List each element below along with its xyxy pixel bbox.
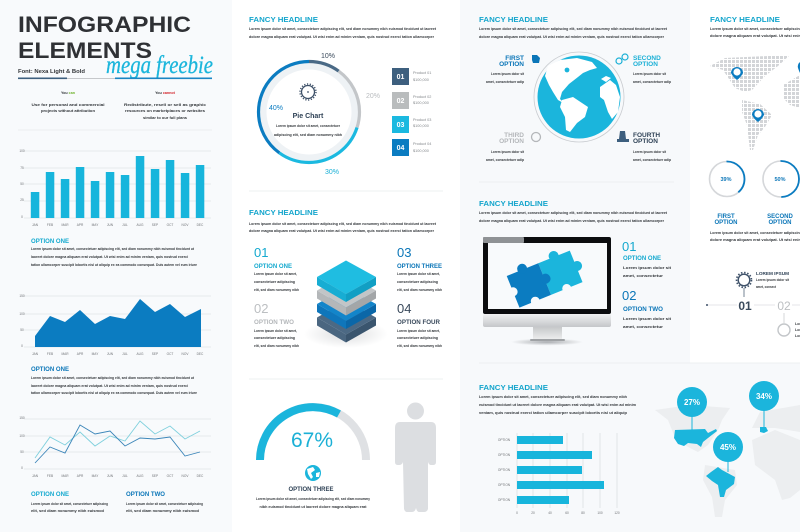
option 01: amet, consectetur	[623, 274, 664, 278]
timeline text: LOREM IPSUM	[756, 271, 790, 276]
text block: line chart option one: elit, sed diam nonummy nibh euismod	[31, 509, 105, 513]
icon: person	[395, 402, 436, 512]
option three text: nibh euismod tincidunt ut laoreet dolore magna aliquam erat	[260, 505, 367, 509]
icon: gear	[300, 84, 316, 100]
panel: layered stack	[249, 208, 443, 348]
first option: OPTION	[499, 61, 524, 68]
icon: globe	[305, 465, 321, 481]
text block: area chart option one: OPTION ONE	[31, 366, 70, 373]
step 02 number: 02	[777, 299, 791, 313]
intro text: veniam, quis nostrud exerci tation ullamcorper suscipit lobortis nisl ut aliquip	[479, 411, 628, 415]
panel: monitor with puzzle	[479, 199, 672, 346]
first option: amet, consectetuer adip	[486, 80, 525, 84]
option 02: amet, consectetur	[623, 325, 664, 329]
text block: area chart option one: tation ullamcorper suscipit lobortis nisl ut aliquip ex ea commodo consequat. Duis autem vel eum iriure	[31, 391, 197, 395]
panel: gauge and person	[256, 402, 436, 512]
line chart: SEP	[152, 474, 158, 478]
legend: Product 04	[413, 142, 431, 146]
dotted map	[710, 55, 800, 150]
bar chart: 100	[19, 149, 25, 153]
timeline text: amet, consect	[756, 285, 777, 289]
icon: fourth option lighthouse	[617, 131, 629, 142]
intro text: Lorem ipsum dolor sit amet, consectetuer adipiscing	[710, 27, 800, 31]
line chart: 100	[19, 434, 25, 438]
intro text: Lorem ipsum dolor sit amet, consectetuer adipiscing elit, sed diam nonummy nibh euismod tincidunt ut laoreet	[479, 27, 668, 31]
fourth option: FOURTH	[633, 132, 660, 139]
option 01: OPTION ONE	[254, 263, 293, 270]
text block: area chart option one: Lorem ipsum dolor sit amet, consectetuer adipiscing elit, sed diam nonummy nibh euismod tincidunt ut	[31, 376, 195, 380]
usage note: you cannot: resources on marketplaces or websites	[125, 109, 205, 113]
option 02: OPTION TWO	[254, 319, 294, 326]
gauge	[260, 407, 366, 460]
legend: $100,000	[413, 78, 429, 82]
third option: THIRD	[504, 132, 524, 139]
panel: horizontal bars	[479, 383, 637, 515]
horizontal bar chart: 120	[614, 511, 620, 515]
option 04: OPTION FOUR	[397, 319, 440, 326]
text below rings: dolore magna aliquam erat volutpat. Ut wisi enim	[710, 238, 800, 242]
option three text: Lorem ipsum dolor sit amet, consectetuer adipiscing elit, sed diam nonummy	[256, 497, 371, 501]
text block: line chart option two	[126, 491, 203, 513]
option 04: elit, sed diam nonummy nibh	[397, 344, 443, 348]
horizontal bar chart: 20	[531, 511, 535, 515]
second option label: OPTION	[768, 220, 792, 226]
intro text: Lorem ipsum dolor sit amet, consectetuer adipiscing elit, sed diam nonummy nibh euismod tincidunt ut laoreet	[249, 222, 437, 226]
legend: $100,000	[413, 101, 429, 105]
bar chart: NOV	[182, 223, 189, 227]
gauge value: 67%	[291, 429, 333, 452]
legend: Product 01	[413, 71, 431, 75]
heading: FANCY HEADLINE	[479, 15, 548, 24]
option 01: OPTION ONE	[623, 255, 662, 262]
third option: amet, consectetuer adip	[486, 158, 525, 162]
option 01: 01	[622, 239, 636, 254]
area chart: 150	[19, 294, 25, 298]
pie labels: 20%	[366, 93, 380, 100]
option 03: Lorem ipsum dolor sit amet,	[397, 272, 440, 276]
second option label: SECOND	[767, 214, 794, 220]
intro text: dolore magna aliquam erat volutpat. Ut wisi enim ad minim veniam, quis nostrud exerci tation ullamcorper	[249, 35, 435, 39]
area chart: 0	[21, 344, 23, 348]
line chart: OCT	[167, 474, 173, 478]
step 01 backing	[737, 298, 754, 312]
intro text: dolore magna aliquam erat volutpat. Ut wisi enim ad minim veniam, quis nostrud exerci tation ullamcorper	[479, 219, 665, 223]
bar chart: JUN	[107, 223, 114, 227]
world map base	[655, 405, 800, 517]
title underline	[18, 78, 212, 79]
area chart: 100	[19, 312, 25, 316]
callout: Europe 34%: 34%	[756, 392, 772, 401]
legend	[392, 68, 431, 156]
intro text: Lorem ipsum dolor sit amet, consectetuer adipiscing elit, sed diam nonummy nibh euismod tincidunt ut laoreet	[249, 27, 437, 31]
usage note: you can	[32, 91, 104, 113]
option 02	[622, 288, 672, 329]
pie center text: Pie Chart	[293, 113, 324, 120]
text block: bar chart option one	[31, 238, 197, 267]
bar chart: 50	[20, 182, 24, 186]
option 02: 02	[254, 301, 268, 316]
second option: OPTION	[633, 61, 658, 68]
legend: 04	[397, 145, 404, 152]
step 01 number: 01	[738, 299, 752, 313]
second option	[633, 55, 672, 84]
heading: FANCY HEADLINE	[249, 15, 318, 24]
progress ring: second option	[763, 161, 799, 197]
callout: Europe 34%	[749, 381, 779, 433]
line chart: 50	[20, 450, 24, 454]
panel: world map with callouts	[655, 381, 800, 517]
text block: area chart option one	[31, 366, 197, 395]
option 02: 02	[622, 288, 636, 303]
option 02: elit, sed diam nonummy nibh	[254, 344, 300, 348]
icon: third option	[532, 132, 540, 142]
line chart: DEC	[197, 474, 204, 478]
area chart: JUN	[107, 352, 114, 356]
timeline text: Lorem ipsum dolor sit	[756, 278, 790, 282]
bar chart: OCT	[167, 223, 173, 227]
bar chart: 0	[21, 215, 23, 219]
second option: Lorem ipsum dolor sit	[633, 72, 667, 76]
area chart: MAY	[92, 352, 99, 356]
line chart: JAN	[32, 474, 39, 478]
option 03: 03	[397, 245, 411, 260]
pie center text	[274, 113, 343, 137]
bar chart: AUG	[137, 223, 144, 227]
bar chart: MAR	[61, 223, 69, 227]
area chart: DEC	[197, 352, 204, 356]
callout: USA 27%	[674, 387, 717, 447]
usage note: you cannot	[124, 91, 206, 120]
bar chart: MAY	[92, 223, 99, 227]
intro text	[249, 27, 437, 39]
text below rings	[710, 231, 800, 242]
option 04: 04	[397, 301, 411, 316]
option 01: Lorem ipsum dolor sit amet,	[254, 272, 297, 276]
intro text	[249, 222, 437, 233]
second option: SECOND	[633, 55, 661, 62]
first option label: OPTION	[714, 220, 738, 226]
bar chart: APR	[77, 223, 84, 227]
text block: line chart option one	[31, 491, 108, 513]
script title: mega freebie: mega freebie	[106, 52, 213, 79]
area chart: FEB	[47, 352, 53, 356]
bar chart: JAN	[32, 223, 39, 227]
map pins	[731, 62, 800, 122]
first option	[486, 55, 525, 84]
icon: timeline gear	[736, 272, 752, 297]
option 01	[622, 239, 672, 278]
globe	[534, 52, 624, 142]
line chart: 0	[21, 466, 23, 470]
first option: Lorem ipsum dolor sit	[491, 72, 525, 76]
option 02	[254, 301, 300, 348]
area chart: NOV	[182, 352, 189, 356]
pie labels: 40%	[269, 105, 283, 112]
usage note: you cannot: You cannot	[155, 91, 176, 95]
option 01	[254, 245, 300, 292]
area chart: JUL	[122, 352, 128, 356]
horizontal bar chart: 80	[581, 511, 585, 515]
fourth option: amet, consectetuer adip	[633, 158, 672, 162]
intro text	[479, 27, 668, 39]
step 02 backing	[775, 298, 792, 312]
option 03: consectetuer adipiscing	[397, 280, 438, 284]
area chart: APR	[77, 352, 84, 356]
area chart: MAR	[61, 352, 69, 356]
horizontal bar chart: 60	[565, 511, 569, 515]
pie ring	[258, 62, 360, 162]
heading: FANCY HEADLINE	[479, 199, 548, 208]
pie labels: 30%	[325, 169, 339, 176]
fourth option: OPTION	[633, 138, 658, 145]
first option: FIRST	[505, 55, 524, 62]
intro text	[479, 395, 637, 415]
option 01: 01	[254, 245, 268, 260]
area chart: AUG	[137, 352, 144, 356]
legend: 01	[397, 74, 404, 81]
bar chart: SEP	[152, 223, 158, 227]
horizontal bar chart: 100	[597, 511, 603, 515]
intro text: dolore magna aliquam erat volutpat. Ut wisi enim ad minim veniam, quis nostrud exerci tation ullamcorper	[479, 35, 665, 39]
option 04: consectetuer adipiscing	[397, 336, 438, 340]
isometric stack	[304, 260, 388, 348]
intro text: euismod tincidunt ut laoreet dolore magna aliquam erat volutpat. Ut wisi enim ad minim	[479, 403, 637, 407]
option 01: consectetuer adipiscing	[254, 280, 295, 284]
horizontal bar chart: OPTION	[498, 468, 511, 472]
usage note: you can: Use for personal and commercial	[32, 103, 104, 107]
option 01: Lorem ipsum dolor sit	[623, 266, 672, 270]
progress ring: first option: 39%	[720, 177, 732, 183]
usage note: you can: projects without attribution	[41, 109, 96, 113]
option 02: Lorem ipsum dolor sit amet,	[254, 329, 297, 333]
legend: 02	[397, 98, 404, 105]
horizontal bar chart: OPTION	[498, 438, 511, 442]
option 04: Lorem ipsum dolor sit amet,	[397, 329, 440, 333]
bar chart: FEB	[47, 223, 53, 227]
option three text: OPTION THREE	[288, 486, 334, 493]
horizontal bar chart	[498, 433, 620, 515]
heading: FANCY HEADLINE	[249, 208, 318, 217]
line chart: JUL	[122, 474, 128, 478]
text block: area chart option one: laoreet dolore magna aliquam erat volutpat. Ut wisi enim ad minim veniam, quis nostrud exerci	[31, 384, 188, 388]
line chart: APR	[77, 474, 84, 478]
line chart: NOV	[182, 474, 189, 478]
line chart: JUN	[107, 474, 114, 478]
fourth option	[633, 132, 672, 162]
intro text: dolore magna aliquam erat volutpat. Ut wisi enim ad minim veniam, quis nostrud exerci tation ullamcorper	[249, 229, 435, 233]
option 04	[397, 301, 443, 348]
bar chart	[19, 149, 211, 227]
text block: bar chart option one: OPTION ONE	[31, 238, 70, 245]
line chart: FEB	[47, 474, 53, 478]
panel: timeline	[706, 271, 800, 338]
pie labels	[269, 53, 380, 176]
heading: FANCY HEADLINE	[479, 383, 548, 392]
option 03: elit, sed diam nonummy nibh	[397, 288, 443, 292]
option 01: elit, sed diam nonummy nibh	[254, 288, 300, 292]
icon: second option link	[616, 54, 628, 64]
bar chart: DEC	[197, 223, 204, 227]
text block: line chart option one: OPTION ONE	[31, 491, 70, 498]
area chart: SEP	[152, 352, 158, 356]
bar chart: JUL	[122, 223, 128, 227]
intro text	[710, 27, 800, 38]
icon: first option puzzle	[532, 55, 540, 63]
third option: OPTION	[499, 138, 524, 145]
option 02: Lorem ipsum dolor sit	[623, 317, 672, 321]
usage note: you cannot: Redistribute, resell or sell as graphic	[124, 103, 206, 107]
panel: dotted world map	[710, 15, 800, 242]
text block: line chart option one: Lorem ipsum dolor sit amet, consectetuer adipiscing	[31, 502, 108, 506]
subtitle: font credit: Font: Nexa Light & Bold	[18, 69, 85, 75]
text block: line chart option two: Lorem ipsum dolor sit amet, consectetuer adipiscing	[126, 502, 203, 506]
line chart	[19, 416, 211, 478]
title	[18, 12, 191, 63]
progress ring: first option	[710, 162, 744, 196]
title: ELEMENTS	[18, 38, 152, 63]
horizontal bar chart: 40	[548, 511, 552, 515]
horizontal bar chart: OPTION	[498, 498, 511, 502]
fourth option: Lorem ipsum dolor sit	[633, 150, 667, 154]
second option label	[767, 214, 794, 226]
first option label: FIRST	[717, 214, 735, 220]
bar chart: 75	[20, 166, 24, 170]
intro text: Lorem ipsum dolor sit amet, consectetuer adipiscing elit, sed diam nonummy nibh euismod tincidunt ut laoreet	[479, 211, 668, 215]
legend: $100,000	[413, 149, 429, 153]
panel: globe	[479, 15, 672, 162]
legend: 03	[397, 122, 404, 129]
area chart	[19, 294, 211, 356]
option 03	[397, 245, 443, 292]
intro text: Lorem ipsum dolor sit amet, consectetuer adipiscing elit, sed diam nonummy nibh	[479, 395, 628, 399]
pie labels: 10%	[321, 53, 335, 60]
monitor	[483, 237, 611, 346]
option 02: consectetuer adipiscing	[254, 336, 295, 340]
callout: USA 27%: 27%	[684, 398, 700, 407]
line chart: MAY	[92, 474, 99, 478]
title: INFOGRAPHIC	[18, 12, 191, 37]
area chart: JAN	[32, 352, 39, 356]
bar chart: 25	[20, 198, 24, 202]
second option: amet, consectetuer adip	[633, 80, 672, 84]
line chart: MAR	[61, 474, 69, 478]
text block: line chart option two: OPTION TWO	[126, 491, 165, 498]
intro text	[479, 211, 668, 223]
text below rings: Lorem ipsum dolor sit amet, consectetuer adipiscing	[710, 231, 800, 235]
timeline text	[756, 271, 790, 289]
option three text	[256, 486, 371, 509]
text block: bar chart option one: laoreet dolore magna aliquam erat volutpat. Ut wisi enim ad minim veniam, quis nostrud exerci	[31, 255, 188, 259]
text block: bar chart option one: Lorem ipsum dolor sit amet, consectetuer adipiscing elit, sed diam nonummy nibh euismod tincidunt ut	[31, 247, 195, 251]
option 02: OPTION TWO	[623, 306, 663, 313]
text block: line chart option two: elit, sed diam nonummy nibh euismod	[126, 509, 200, 513]
legend: $100,000	[413, 124, 429, 128]
horizontal bar chart: 0	[516, 511, 518, 515]
third option	[486, 132, 525, 162]
text block: bar chart option one: tation ullamcorper suscipit lobortis nisl ut aliquip ex ea commodo consequat. Duis autem vel eum iriure	[31, 263, 197, 267]
first option label	[714, 214, 738, 226]
progress ring: second option: 50%	[774, 177, 786, 183]
option 03: OPTION THREE	[397, 263, 443, 270]
horizontal bar chart: OPTION	[498, 453, 511, 457]
horizontal bar chart: OPTION	[498, 483, 511, 487]
heading: FANCY HEADLINE	[710, 15, 780, 24]
legend: Product 03	[413, 118, 431, 122]
line chart: AUG	[137, 474, 144, 478]
panel: pie chart	[249, 15, 437, 176]
panel: title and intro	[18, 12, 213, 120]
legend: Product 02	[413, 95, 431, 99]
area chart: 50	[20, 328, 24, 332]
line chart: 150	[19, 416, 25, 420]
pie center text: Lorem ipsum dolor sit amet, consectetuer	[276, 124, 340, 128]
puzzle pieces	[500, 243, 590, 313]
callout: Brazil 45%: 45%	[720, 443, 736, 452]
icon: timeline lower gear	[778, 313, 790, 336]
callout: Brazil 45%	[706, 432, 743, 497]
usage note: you cannot: similar to our full plans	[143, 116, 187, 120]
intro text: dolore magna aliquam erat volutpat. Ut wisi enim	[710, 34, 800, 38]
usage note: you can: You can	[61, 91, 76, 95]
third option: Lorem ipsum dolor sit	[491, 150, 525, 154]
pie center text: adipiscing elit, sed diam nonummy nibh	[274, 133, 343, 137]
timeline lower text	[795, 322, 800, 338]
area chart: OCT	[167, 352, 173, 356]
